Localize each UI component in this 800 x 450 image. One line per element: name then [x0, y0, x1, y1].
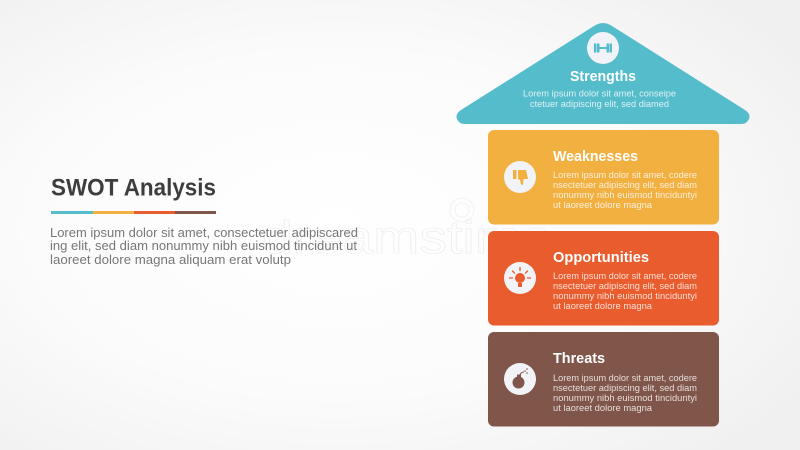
text: threats body: nonummy nibh euismod tinciduntyi [553, 393, 697, 404]
text: opportunities body: nsectetuer adipiscing elit, sed diam [553, 281, 697, 292]
arrow roof shape [456, 23, 750, 124]
heading: strengths: Strengths [570, 68, 636, 85]
icon: light bulb [504, 262, 536, 294]
text: strengths body: ctetuer adipiscing elit, sed diamed [530, 99, 669, 110]
text: weaknesses body: nonummy nibh euismod tinciduntyi [553, 190, 697, 201]
intro paragraph [50, 226, 358, 267]
panel: threats [488, 332, 719, 426]
icon: dumbbell [587, 32, 619, 64]
heading: threats: Threats [553, 350, 605, 367]
title: SWOT Analysis [51, 174, 216, 202]
text: strengths body [523, 88, 676, 110]
intro paragraph: Lorem ipsum dolor sit amet, consectetuer adipiscared [50, 226, 358, 240]
text: opportunities body: Lorem ipsum dolor sit amet, codere [553, 271, 697, 282]
heading: weaknesses: Weaknesses [553, 148, 638, 165]
heading: opportunities: Opportunities [553, 249, 649, 266]
title underline: four colour bar [51, 211, 216, 214]
text: weaknesses body: Lorem ipsum dolor sit amet, codere [553, 170, 697, 181]
panel: weaknesses [488, 130, 719, 224]
icon: thumbs down [504, 161, 536, 193]
text: threats body: Lorem ipsum dolor sit amet, codere [553, 373, 697, 384]
text: weaknesses body: nsectetuer adipiscing elit, sed diam [553, 180, 697, 191]
text: strengths body: Lorem ipsum dolor sit amet, conseipe [523, 88, 676, 100]
text: weaknesses body: ut laoreet dolore magna [553, 200, 653, 211]
panel: strengths [456, 23, 750, 124]
intro paragraph: laoreet dolore magna aliquam erat volutp [50, 253, 291, 267]
watermark [262, 198, 552, 263]
intro paragraph: ing elit, sed diam nonummy nibh euismod tincidunt ut [50, 239, 358, 253]
icon: bomb [504, 363, 536, 395]
text: opportunities body [553, 271, 697, 312]
text: weaknesses body [553, 170, 697, 211]
watermark: dreamstime [262, 211, 552, 263]
text: opportunities body: nonummy nibh euismod tinciduntyi [553, 291, 697, 302]
panel: opportunities [488, 231, 719, 326]
text: threats body: ut laoreet dolore magna [553, 403, 653, 414]
text: threats body [553, 373, 697, 414]
text: opportunities body: ut laoreet dolore magna [553, 301, 653, 312]
text: threats body: nsectetuer adipiscing elit, sed diam [553, 383, 697, 394]
